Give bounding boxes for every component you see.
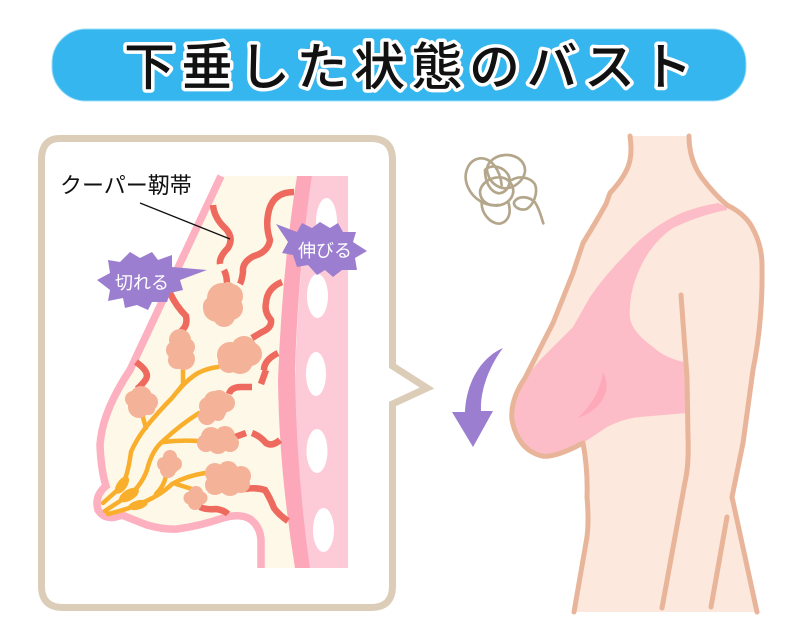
- lobule 9: [184, 486, 208, 510]
- burst: stretched: 伸びる: [298, 241, 352, 261]
- title text: 下垂した状態のバスト: [124, 39, 699, 96]
- bra / breast pink area: [512, 203, 727, 457]
- down arrow: [452, 348, 503, 447]
- rib ovals: [306, 198, 337, 552]
- Cooper's ligaments: [136, 192, 294, 521]
- breast cross-section diagram: [97, 176, 348, 568]
- label: Cooper's ligament: クーパー靭帯: [60, 173, 192, 198]
- body outlines: [512, 136, 762, 612]
- leader line: [140, 203, 230, 239]
- burst: torn: 切れる: [115, 273, 169, 293]
- lobule 3: [217, 336, 262, 374]
- duct bulges near nipple: [112, 474, 149, 512]
- mammary lobules: [125, 282, 262, 510]
- fatty tissue: [97, 176, 300, 568]
- lobule 4: [125, 386, 158, 418]
- burst: stretched: [276, 222, 367, 277]
- lobule 7: [157, 450, 182, 478]
- burst: torn: [97, 252, 207, 310]
- lobule 8: [205, 461, 251, 496]
- tangled thread icon: [466, 155, 543, 224]
- speech bubble panel: [42, 138, 427, 608]
- skin outline: [97, 176, 261, 568]
- breast crease: [578, 372, 607, 418]
- pectoral muscle band: [278, 176, 312, 568]
- body side profile: [512, 136, 762, 612]
- lobule 2: [166, 329, 195, 370]
- title banner: [52, 29, 746, 101]
- lobule 5: [198, 390, 235, 425]
- milk ducts: [103, 367, 218, 514]
- body fill: [512, 136, 762, 612]
- chest wall ribs panel: [295, 176, 348, 568]
- lobule 6: [197, 426, 239, 454]
- lobule 1: [203, 282, 243, 327]
